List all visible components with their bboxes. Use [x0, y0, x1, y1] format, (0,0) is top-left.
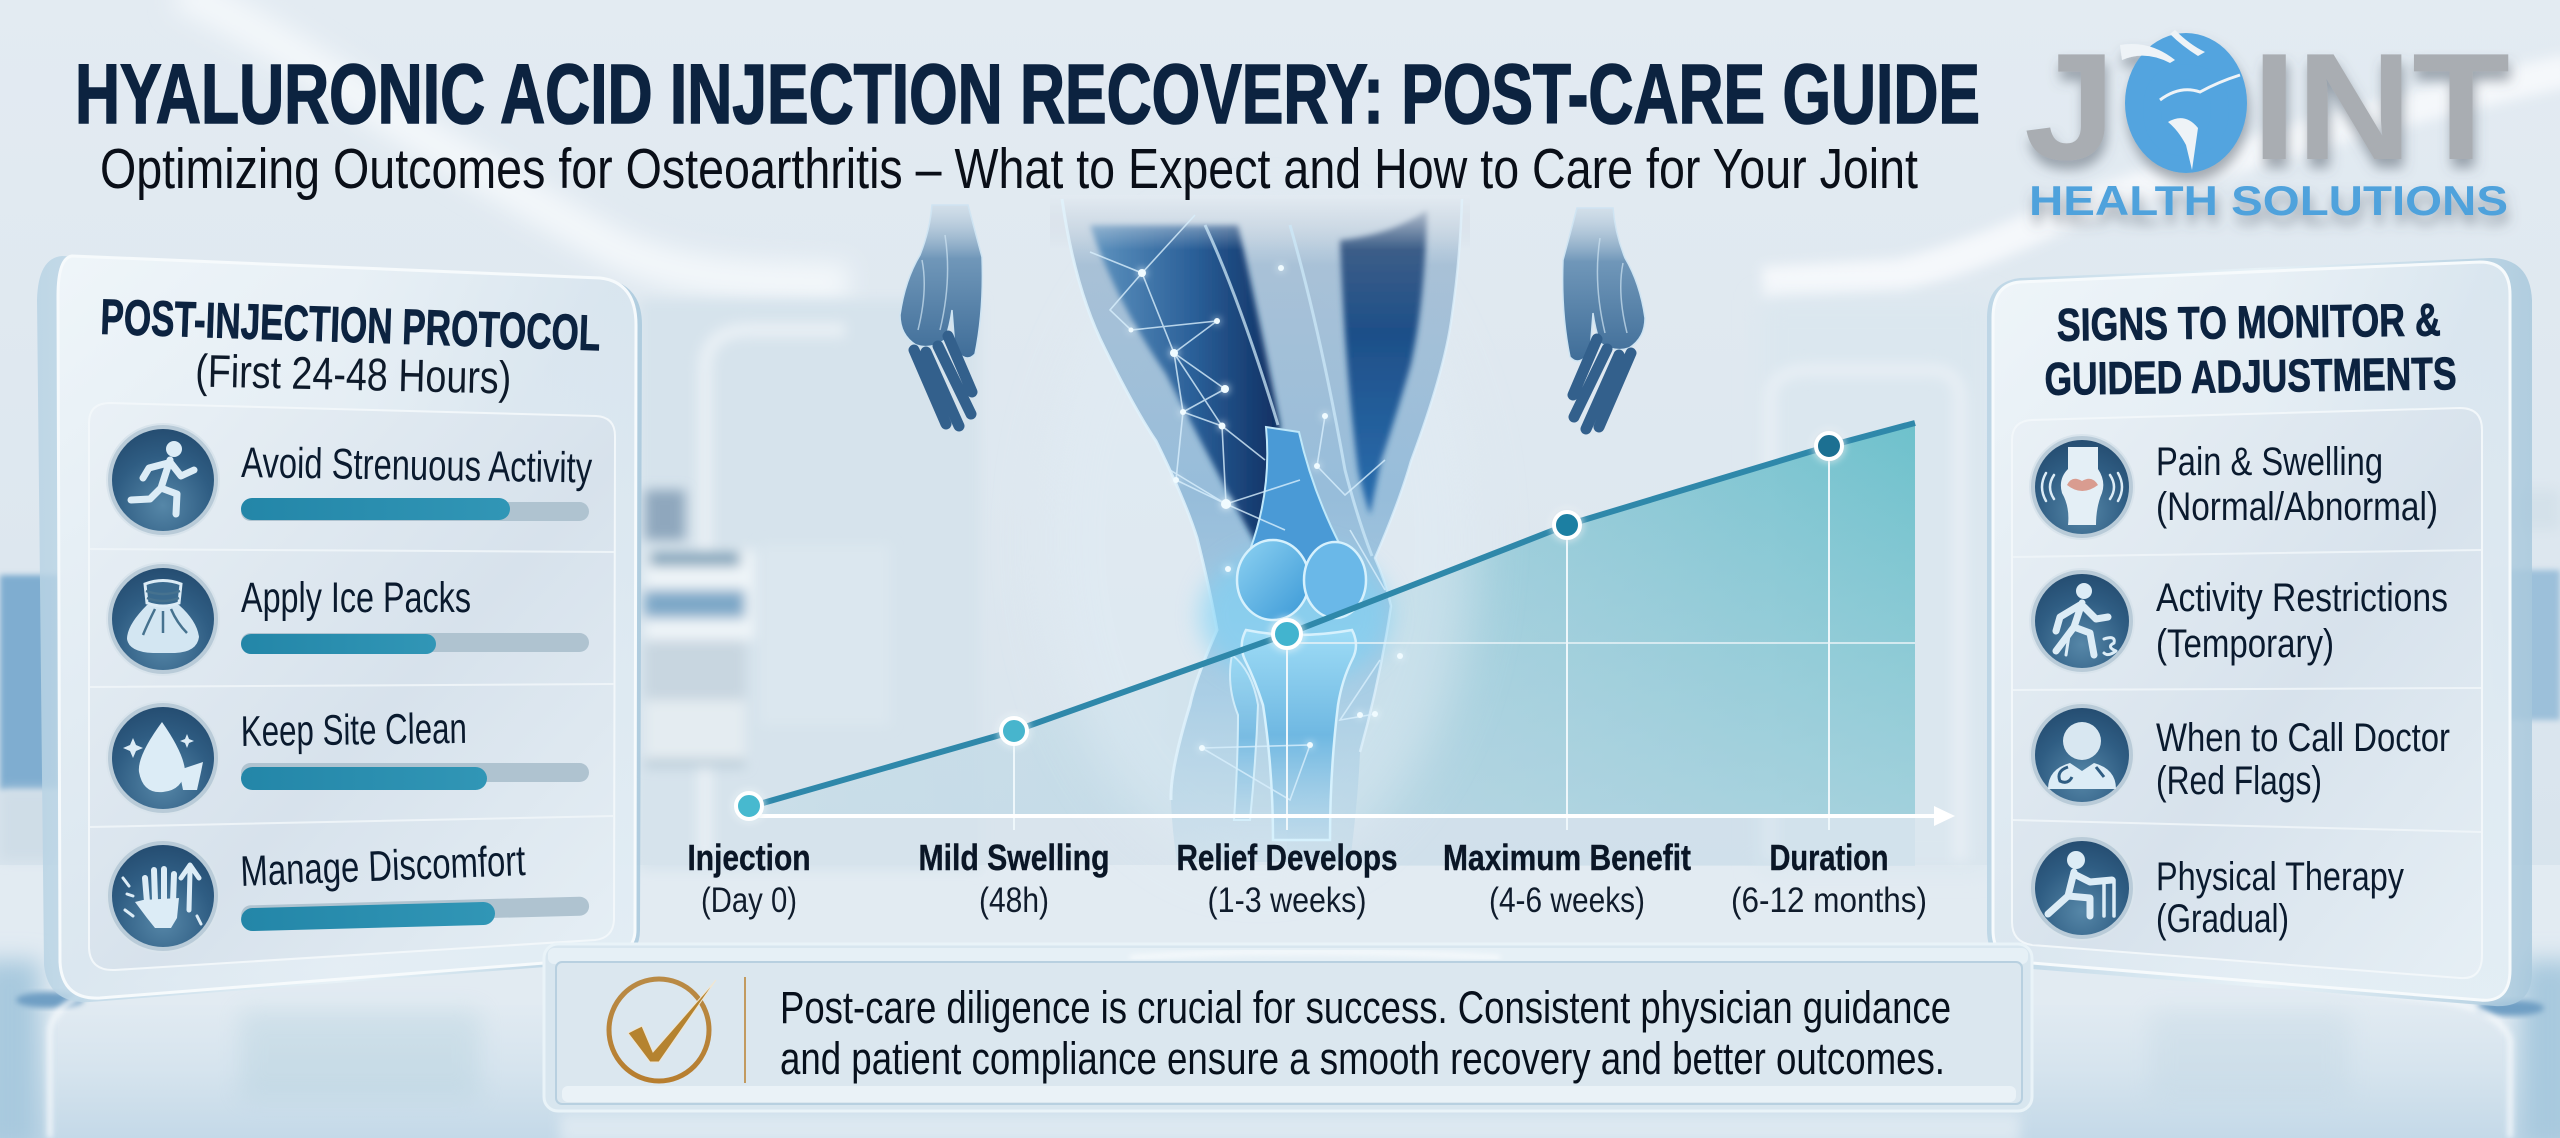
glass slab	[1987, 258, 2532, 1006]
icon: person walking with cane	[2030, 569, 2134, 673]
label: Avoid Strenuous Activity	[241, 439, 593, 493]
label: Physical Therapy	[2156, 855, 2404, 899]
progress bar 71%	[241, 763, 589, 790]
progress bar 73%	[241, 896, 589, 931]
network lines	[1090, 215, 1385, 800]
label: (Normal/Abnormal)	[2156, 485, 2438, 529]
label: duration	[1731, 837, 1927, 920]
icon: ice pack	[107, 563, 219, 675]
panel: post-injection protocol	[37, 256, 642, 1002]
fibula	[1230, 655, 1258, 820]
glow behind joint	[1200, 545, 1390, 685]
heading: SIGNS TO MONITOR &	[2056, 293, 2441, 351]
label: mild swelling: Mild Swelling	[918, 837, 1110, 878]
tibia	[1242, 630, 1356, 840]
label: relief develops	[1176, 837, 1398, 920]
heading	[2043, 293, 2457, 405]
label: Apply Ice Packs	[241, 574, 471, 622]
logo: Joint Health Solutions	[2024, 22, 2510, 224]
label: injection: Injection	[688, 837, 810, 878]
logo: Joint Health Solutions: HEALTH SOLUTIONS	[2029, 177, 2508, 224]
row: when to call doctor	[2030, 703, 2450, 807]
row: apply ice packs	[107, 563, 589, 675]
callout: post-care diligence	[544, 944, 2032, 1111]
door arch	[705, 330, 845, 860]
x axis with arrow	[749, 806, 1955, 826]
label: Manage Discomfort	[240, 837, 526, 896]
label: relief develops: (1-3 weeks)	[1208, 881, 1366, 920]
row: manage discomfort	[107, 837, 589, 952]
progress bar 56%	[241, 633, 589, 654]
label: injection	[688, 837, 810, 920]
inner card	[2012, 408, 2482, 978]
dark thigh strip	[1340, 210, 1427, 515]
illustration: right hand	[1563, 208, 1645, 429]
icon: water drop and soap	[107, 702, 219, 814]
divider	[744, 977, 746, 1083]
label: Activity Restrictions	[2156, 576, 2448, 620]
panel: signs to monitor and guided adjustments	[1987, 258, 2532, 1006]
label: (Red Flags)	[2156, 759, 2322, 803]
callout text: Post-care diligence is crucial for success. Consistent physician guidance	[780, 982, 1951, 1033]
label: Pain & Swelling	[2156, 440, 2383, 484]
line chart: recovery timeline	[688, 423, 1955, 920]
floor reflections	[50, 950, 540, 1138]
callout text	[780, 982, 1951, 1084]
label: injection: (Day 0)	[701, 881, 797, 920]
chart area fill under recovery curve	[749, 423, 1915, 866]
label: Keep Site Clean	[240, 705, 467, 756]
floor edge tint	[0, 960, 40, 1138]
icon: knee pain	[2030, 435, 2134, 539]
soft halo	[1045, 210, 1475, 870]
icon: lunge with support	[2030, 836, 2134, 940]
logo: Joint Health Solutions: O	[2138, 37, 2234, 183]
icon: doctor	[2030, 703, 2134, 807]
dark thigh interior	[1090, 225, 1280, 548]
node: relief develops	[1273, 620, 1301, 648]
icon: hand with arrow	[107, 840, 219, 952]
ceiling light right	[1763, 70, 2560, 283]
logo: Joint Health Solutions: INT	[2252, 22, 2510, 192]
label	[2156, 716, 2450, 803]
callout text: and patient compliance ensure a smooth recovery and better outcomes.	[780, 1033, 1945, 1084]
label: duration: (6-12 months)	[1731, 881, 1927, 920]
label	[2156, 855, 2404, 941]
glass block	[544, 944, 2032, 1111]
subheading: (First 24-48 Hours)	[195, 344, 512, 404]
illustration: left hand	[900, 205, 982, 426]
label: maximum benefit	[1443, 837, 1691, 920]
label: duration: Duration	[1770, 837, 1888, 878]
horizontal guide	[1287, 642, 1915, 644]
heading: POST-INJECTION PROTOCOL	[100, 289, 601, 361]
subtitle: Optimizing Outcomes for Osteoarthritis – What to Expect and How to Care for Your Joint	[100, 137, 1918, 201]
row: keep site clean	[107, 702, 589, 814]
bright contour	[1062, 199, 1217, 800]
icon: gold check mark in ring	[609, 979, 716, 1081]
row: physical therapy	[2030, 836, 2404, 941]
trend line	[749, 423, 1915, 807]
vertical guides	[1014, 446, 1829, 830]
progress bar 78%	[241, 498, 589, 521]
ceiling light left	[180, 0, 848, 283]
label: (Temporary)	[2156, 622, 2334, 666]
label: (Gradual)	[2156, 897, 2289, 941]
node: maximum benefit	[1554, 512, 1580, 538]
fade into background at top	[1050, 195, 1470, 250]
femur with condyles	[1237, 427, 1366, 620]
leg silhouette	[1062, 199, 1462, 862]
label: maximum benefit: Maximum Benefit	[1443, 837, 1691, 878]
glass slab	[37, 256, 642, 1002]
row: avoid strenuous activity	[107, 424, 593, 536]
label: mild swelling	[918, 837, 1110, 920]
node: duration	[1816, 433, 1842, 459]
label: relief develops: Relief Develops	[1176, 837, 1398, 878]
row: pain and swelling	[2030, 435, 2438, 539]
label: When to Call Doctor	[2156, 716, 2450, 760]
label: maximum benefit: (4-6 weeks)	[1489, 881, 1645, 920]
network nodes	[1128, 265, 1403, 751]
label: mild swelling: (48h)	[979, 881, 1049, 920]
label	[2156, 576, 2448, 666]
label	[2156, 440, 2438, 529]
inner card	[89, 403, 615, 970]
illustration: translucent leg with knee joint and neural network	[1045, 195, 1475, 870]
node: injection	[736, 793, 762, 819]
logo: Joint Health Solutions: J	[2024, 22, 2116, 192]
node: mild swelling	[1001, 718, 1027, 744]
icon: running person	[107, 424, 219, 536]
row: activity restrictions	[2030, 569, 2448, 673]
blurred bed	[645, 490, 755, 766]
